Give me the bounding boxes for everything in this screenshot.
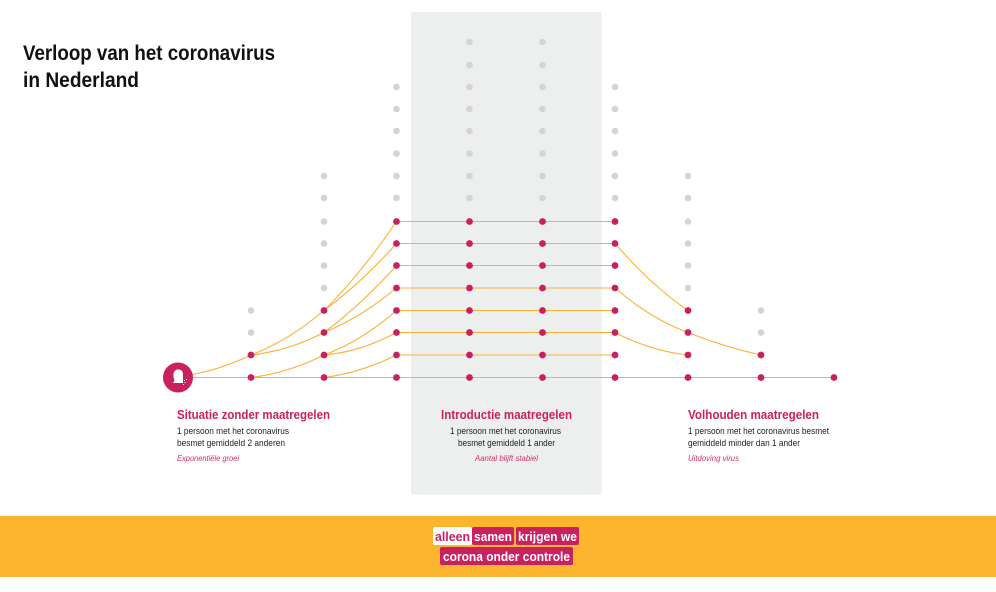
title: in Nederland — [23, 69, 139, 92]
text block: introductie maatregelen: Aantal blijft stabiel — [474, 453, 539, 463]
text block: situatie zonder maatregelen — [177, 408, 330, 463]
slogan — [433, 527, 579, 565]
text block: introductie maatregelen: Introductie maatregelen — [441, 408, 572, 422]
slogan: corona onder controle — [443, 549, 570, 564]
text block: situatie zonder maatregelen: 1 persoon met het coronavirus — [177, 426, 289, 436]
panel: middle grey background — [411, 12, 602, 494]
text block: volhouden maatregelen: Uitdoving virus — [688, 453, 740, 463]
text block: volhouden maatregelen: 1 persoon met het coronavirus besmet — [688, 426, 829, 436]
text block: situatie zonder maatregelen: besmet gemiddeld 2 anderen — [177, 438, 285, 448]
title — [23, 42, 275, 92]
slogan: alleen — [435, 529, 470, 544]
banner — [0, 516, 996, 577]
grey dots: potential infections — [248, 39, 764, 336]
text block: volhouden maatregelen — [688, 408, 829, 463]
text block: introductie maatregelen: besmet gemiddeld 1 ander — [458, 438, 555, 448]
slogan: krijgen we — [518, 529, 577, 544]
text block: volhouden maatregelen: gemiddeld minder dan 1 ander — [688, 438, 800, 448]
slogan: samen — [474, 529, 512, 544]
orange infection lines — [178, 222, 834, 378]
text block: introductie maatregelen: 1 persoon met het coronavirus — [450, 426, 561, 436]
text block: volhouden maatregelen: Volhouden maatregelen — [688, 408, 819, 422]
text block: situatie zonder maatregelen: Exponentiële groei — [177, 453, 240, 463]
text block: situatie zonder maatregelen: Situatie zonder maatregelen — [177, 408, 330, 422]
title: Verloop van het coronavirus — [23, 42, 275, 65]
pink dots: infected people — [248, 218, 837, 381]
text block: introductie maatregelen — [441, 408, 572, 463]
icon: coughing person — [163, 362, 193, 392]
